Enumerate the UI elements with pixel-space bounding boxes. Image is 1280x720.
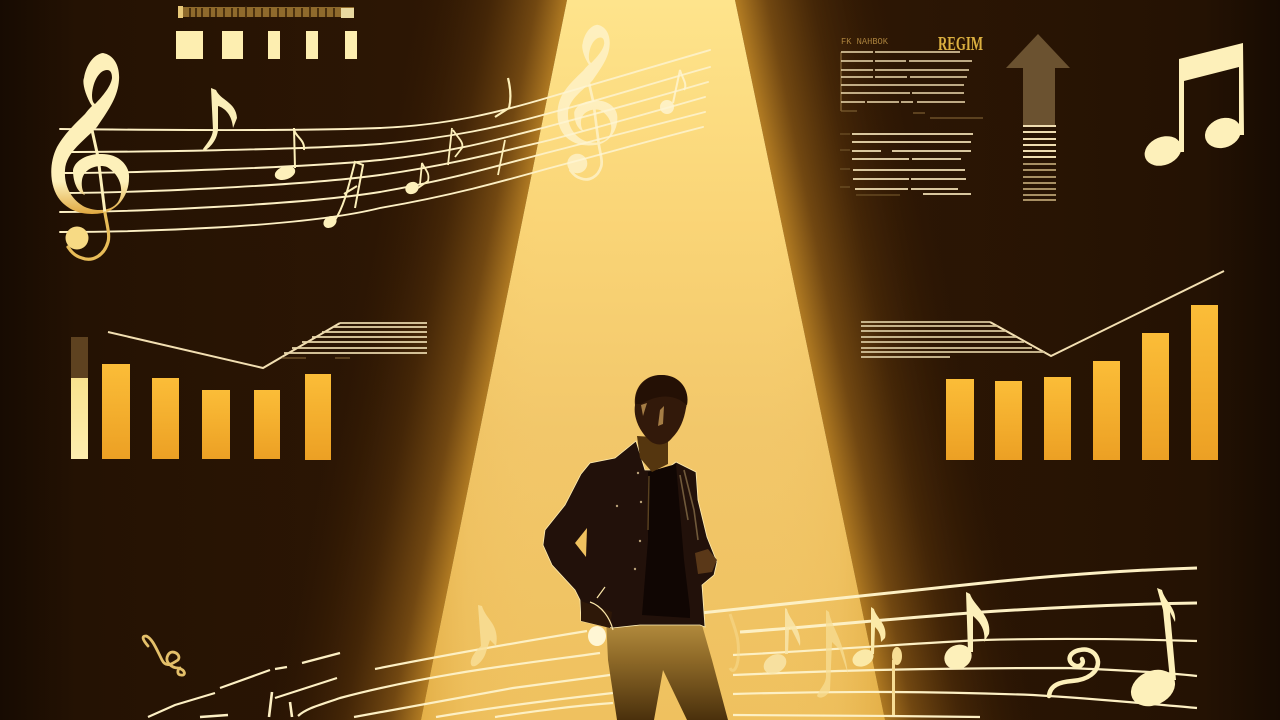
person silhouette <box>543 375 728 720</box>
note: large <box>1125 588 1181 713</box>
icon: white glow at hip <box>588 626 606 646</box>
hair <box>636 375 688 405</box>
note: translucent tall <box>817 610 848 698</box>
note: double flag left <box>850 607 885 670</box>
note: faded clef <box>730 614 739 670</box>
jacket details <box>616 472 642 570</box>
note: bass clef <box>1049 650 1098 696</box>
jacket <box>543 441 717 628</box>
icons: notes on lower staff <box>730 588 1181 715</box>
note: translucent head <box>760 608 800 678</box>
icon: small notes on upper staff <box>404 78 510 195</box>
label: report accent: REGIM <box>938 33 983 55</box>
face highlights <box>641 403 664 426</box>
note: double flag right <box>940 592 989 674</box>
icon: quaver on staff <box>203 88 237 151</box>
icon: treble clef in the beam <box>557 25 617 179</box>
trend line <box>990 271 1224 356</box>
striped lines <box>861 322 1045 357</box>
icon: note in the beam <box>660 70 685 114</box>
icon: quaver 2 <box>274 128 304 182</box>
note: thin stem <box>892 647 902 715</box>
bar chart: right <box>861 271 1224 460</box>
striped lines <box>284 323 427 353</box>
jacket pocket <box>581 601 612 628</box>
upper music staff <box>60 50 710 232</box>
top-left strip and squares <box>176 6 357 59</box>
icon: beamed music note <box>1140 43 1246 171</box>
neck <box>637 436 668 472</box>
spotlight beam <box>268 0 1038 720</box>
arrow: upward <box>1006 34 1070 200</box>
icon: large treble clef <box>51 53 129 259</box>
chart bars <box>946 305 1218 460</box>
trend line <box>108 323 340 368</box>
chart bars <box>71 337 331 460</box>
icon: small clef <box>143 636 184 675</box>
hand <box>695 549 717 574</box>
icon: beamed notes <box>323 162 363 229</box>
icon: note in lower beam <box>471 605 497 666</box>
label: report heading: FK NAHBOK <box>841 36 888 47</box>
legs <box>606 618 728 720</box>
lower music staff <box>148 568 1197 717</box>
bar chart: left <box>71 323 427 460</box>
arm gap <box>575 528 587 557</box>
shirt <box>642 464 690 618</box>
panel: report text lines <box>840 33 983 195</box>
head <box>635 375 687 444</box>
